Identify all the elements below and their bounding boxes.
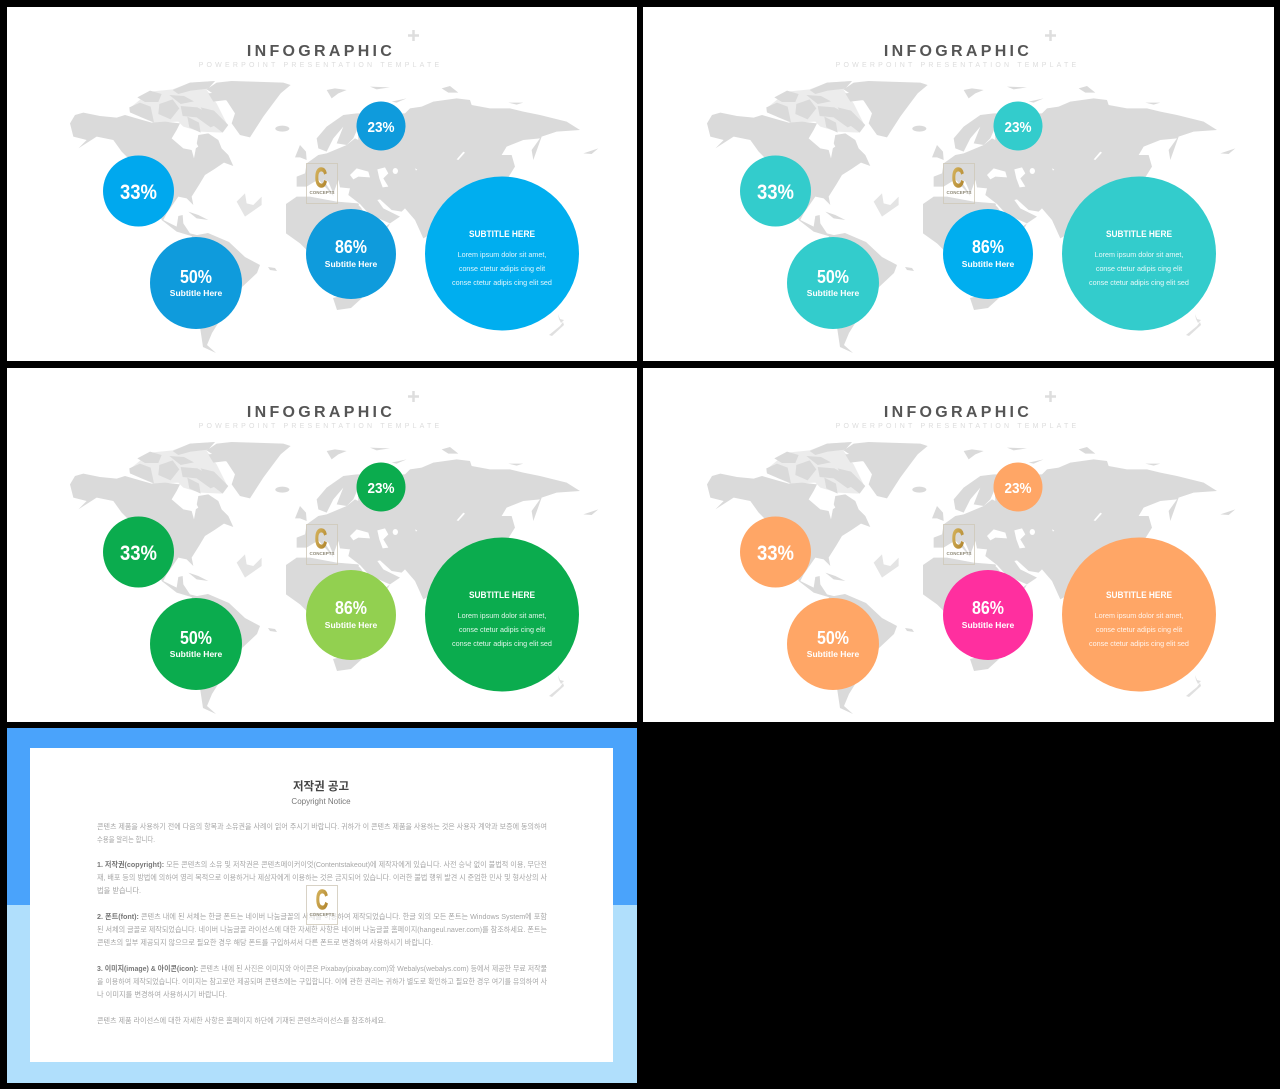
bubble: 86%: 86% [335, 237, 367, 257]
bubble: subtitle text: conse ctetur adipis cing elit [459, 264, 545, 273]
bubble: subtitle text: SUBTITLE HERE [469, 590, 535, 600]
text block: copyright [97, 859, 547, 895]
bubble: 50% [150, 237, 242, 329]
bubble: 23%: 23% [1004, 480, 1032, 497]
plus icon [408, 391, 419, 402]
bubble: subtitle text: conse ctetur adipis cing elit sed [1089, 278, 1189, 287]
bubble: 86%: Subtitle Here [962, 259, 1014, 269]
bubble: subtitle text: Lorem ipsum dolor sit amet, [458, 250, 546, 259]
text block: copyright: 법을 받습니다. [97, 885, 141, 895]
text block: image and icon: 나 이미지를 변경하여 사용하시기 바랍니다. [97, 989, 227, 999]
bubble: 33% [740, 516, 811, 588]
bubble: 50%: Subtitle Here [807, 649, 859, 659]
bubble: 23%: 23% [368, 119, 394, 136]
watermark logo [306, 523, 338, 564]
bubble: 23%: 23% [368, 480, 394, 497]
world map [70, 442, 598, 714]
panel: infographic slide, blue [7, 7, 637, 361]
bubble: 86% [943, 570, 1033, 660]
heading: copyright notice: 저작권 공고 [293, 779, 349, 793]
bubble: 50% [787, 598, 879, 690]
text block: image and icon: 3. 이미지(image) & 아이콘(icon): 콘텐츠 내에 된 사진은 이미지와 아이콘은 Pixabay(pixabay.com)와 Webalys(webalys.com) 등에서 제공한 무료 저작물 [97, 963, 547, 973]
bubble: 50%: 50% [180, 267, 212, 287]
text block: font: 2. 폰트(font): 콘텐츠 내에 된 서체는 한글 폰트는 네이버 나눔글꼴의 서체를 이용하여 제작되었습니다. 한글 외의 모든 폰트는 Windows System에 포함 [97, 911, 547, 921]
watermark logo: C [316, 884, 328, 915]
text block: font: 콘텐츠의 일부 제공되지 않으므로 필요한 경우 해당 폰트를 구입하셔서 다른 폰트로 변경하여 사용하시기 바랍니다. [97, 937, 433, 947]
bubble: 33% [740, 156, 811, 226]
bubble: 23% [994, 462, 1042, 512]
text block: intro: 콘텐츠 제품을 사용하기 전에 다음의 항목과 소유권을 사례이 읽어 주시기 바랍니다. 귀하가 이 콘텐츠 제품을 사용하는 것은 사용자 계약과 보증에 동의하여 [97, 821, 547, 831]
bubble: 50%: Subtitle Here [807, 288, 859, 298]
text block: copyright: 재, 배포 등의 방법에 의하여 영리 목적으로 이용하거나 제삼자에게 이용하는 것은 금지되어 있습니다. 이러한 불법 행위 발견 시 준엄한 민사 및 형사상의 사 [97, 872, 547, 882]
bubble: 86% [306, 209, 396, 299]
bubble: subtitle text: conse ctetur adipis cing elit sed [452, 639, 552, 648]
panel: infographic slide, teal [643, 7, 1274, 361]
title: INFOGRAPHIC [247, 43, 395, 60]
bubble: 23%: 23% [1004, 119, 1032, 136]
bubble: subtitle text: SUBTITLE HERE [469, 229, 535, 239]
watermark logo: CONCEPTS [946, 551, 972, 556]
bubble: 86%: 86% [335, 598, 367, 618]
title: INFOGRAPHIC [247, 404, 395, 421]
bubble: subtitle text: conse ctetur adipis cing elit [459, 625, 545, 634]
bubble: 50%: Subtitle Here [170, 649, 222, 659]
bubble: 86%: Subtitle Here [962, 620, 1014, 630]
subtitle: POWERPOINT PRESENTATION TEMPLATE [199, 62, 442, 69]
sub heading: Copyright Notice [291, 797, 351, 806]
bubble: subtitle text: Lorem ipsum dolor sit amet, [1095, 250, 1183, 259]
bubble: 33% [103, 156, 174, 226]
watermark logo: CONCEPTS [309, 190, 335, 195]
text block: image and icon [97, 963, 547, 999]
bubble: 86%: 86% [972, 598, 1004, 618]
watermark logo: CONCEPTS [309, 551, 335, 556]
plus icon [408, 30, 419, 41]
plus icon [1045, 30, 1056, 41]
bubble: subtitle text: conse ctetur adipis cing elit sed [452, 278, 552, 287]
bubble: subtitle text [425, 538, 579, 692]
bubble: subtitle text: conse ctetur adipis cing elit [1096, 625, 1182, 634]
watermark logo: C [315, 162, 327, 193]
bubble: 33%: 33% [120, 181, 157, 204]
watermark logo: C [952, 523, 964, 554]
bubble: subtitle text: conse ctetur adipis cing elit sed [1089, 639, 1189, 648]
subtitle: POWERPOINT PRESENTATION TEMPLATE [199, 423, 442, 430]
text block: image and icon: 을 이용하여 제작되었습니다. 이미지는 참고로만 제공되며 콘텐츠에는 구입합니다. 이에 관한 권리는 귀하가 별도로 확인하고 필요한 경우 여기를 유의하여 사 [97, 976, 547, 986]
bubble: subtitle text: conse ctetur adipis cing elit [1096, 264, 1182, 273]
title: INFOGRAPHIC [884, 43, 1032, 60]
bubble: subtitle text: SUBTITLE HERE [1106, 590, 1172, 600]
watermark logo [306, 162, 338, 204]
plus icon [1045, 391, 1056, 402]
watermark logo: C [315, 523, 327, 554]
text block: intro: 수용을 알리는 합니다. [97, 834, 155, 844]
bubble: subtitle text [1062, 176, 1216, 330]
text block: license footer: 콘텐츠 제품 라이선스에 대한 자세한 사항은 홈페이지 하단에 기재된 콘텐츠라이선스를 참조하세요. [97, 1015, 386, 1025]
bubble: 86%: Subtitle Here [325, 620, 377, 630]
watermark logo [944, 523, 974, 564]
bubble: 33%: 33% [757, 542, 794, 565]
bubble: 50% [787, 237, 879, 329]
bubble: subtitle text: Lorem ipsum dolor sit amet, [458, 611, 546, 620]
bubble: subtitle text: Lorem ipsum dolor sit amet, [1095, 611, 1183, 620]
bubble: subtitle text [425, 176, 579, 330]
watermark logo: C [952, 162, 964, 193]
bubble: 50% [150, 598, 242, 690]
bubble: 23% [994, 102, 1042, 150]
world map [707, 442, 1235, 714]
bubble: 33%: 33% [120, 542, 157, 565]
bubble: subtitle text: SUBTITLE HERE [1106, 229, 1172, 239]
watermark logo: CONCEPTS [309, 912, 335, 917]
text block: copyright: 1. 저작권(copyright): 모든 콘텐츠의 소유 및 저작권은 콘텐츠메이커이엇(Contentstakeout)에 제작자에게 있습니다. 사전 승낙 없이 불법적 이용, 무단전 [97, 859, 547, 869]
bubble: subtitle text [1062, 538, 1216, 692]
bubble: 23% [356, 462, 406, 512]
text block: font [97, 911, 547, 947]
bubble: 33%: 33% [757, 181, 794, 204]
bubble: 50%: 50% [817, 628, 849, 648]
text block: intro [97, 821, 547, 844]
subtitle: POWERPOINT PRESENTATION TEMPLATE [836, 423, 1079, 430]
watermark logo: CONCEPTS [946, 190, 972, 195]
bubble: 86% [306, 570, 396, 660]
watermark logo [306, 884, 338, 924]
title: INFOGRAPHIC [884, 404, 1032, 421]
bubble: 86%: 86% [972, 237, 1004, 257]
bubble: 50%: Subtitle Here [170, 288, 222, 298]
bubble: 50%: 50% [817, 267, 849, 287]
bubble: 33% [103, 516, 174, 588]
subtitle: POWERPOINT PRESENTATION TEMPLATE [836, 62, 1079, 69]
watermark logo [944, 162, 974, 204]
world map [70, 81, 598, 353]
panel: infographic slide, green [7, 368, 637, 722]
bubble: 23% [356, 102, 406, 150]
bubble: 50%: 50% [180, 628, 212, 648]
panel: copyright notice [7, 728, 637, 1083]
bubble: 86% [943, 209, 1033, 299]
bubble: 86%: Subtitle Here [325, 259, 377, 269]
world map [707, 81, 1235, 353]
panel: infographic slide, orange [643, 368, 1274, 722]
text block: font: 된 서체의 글꼴로 제작되었습니다. 네이버 나눔글꼴 라이선스에 대한 자세한 사항은 네이버 나눔글꼴 홈페이지(hangeul.naver.com)를 참조하세요. 폰트는 [97, 924, 547, 934]
